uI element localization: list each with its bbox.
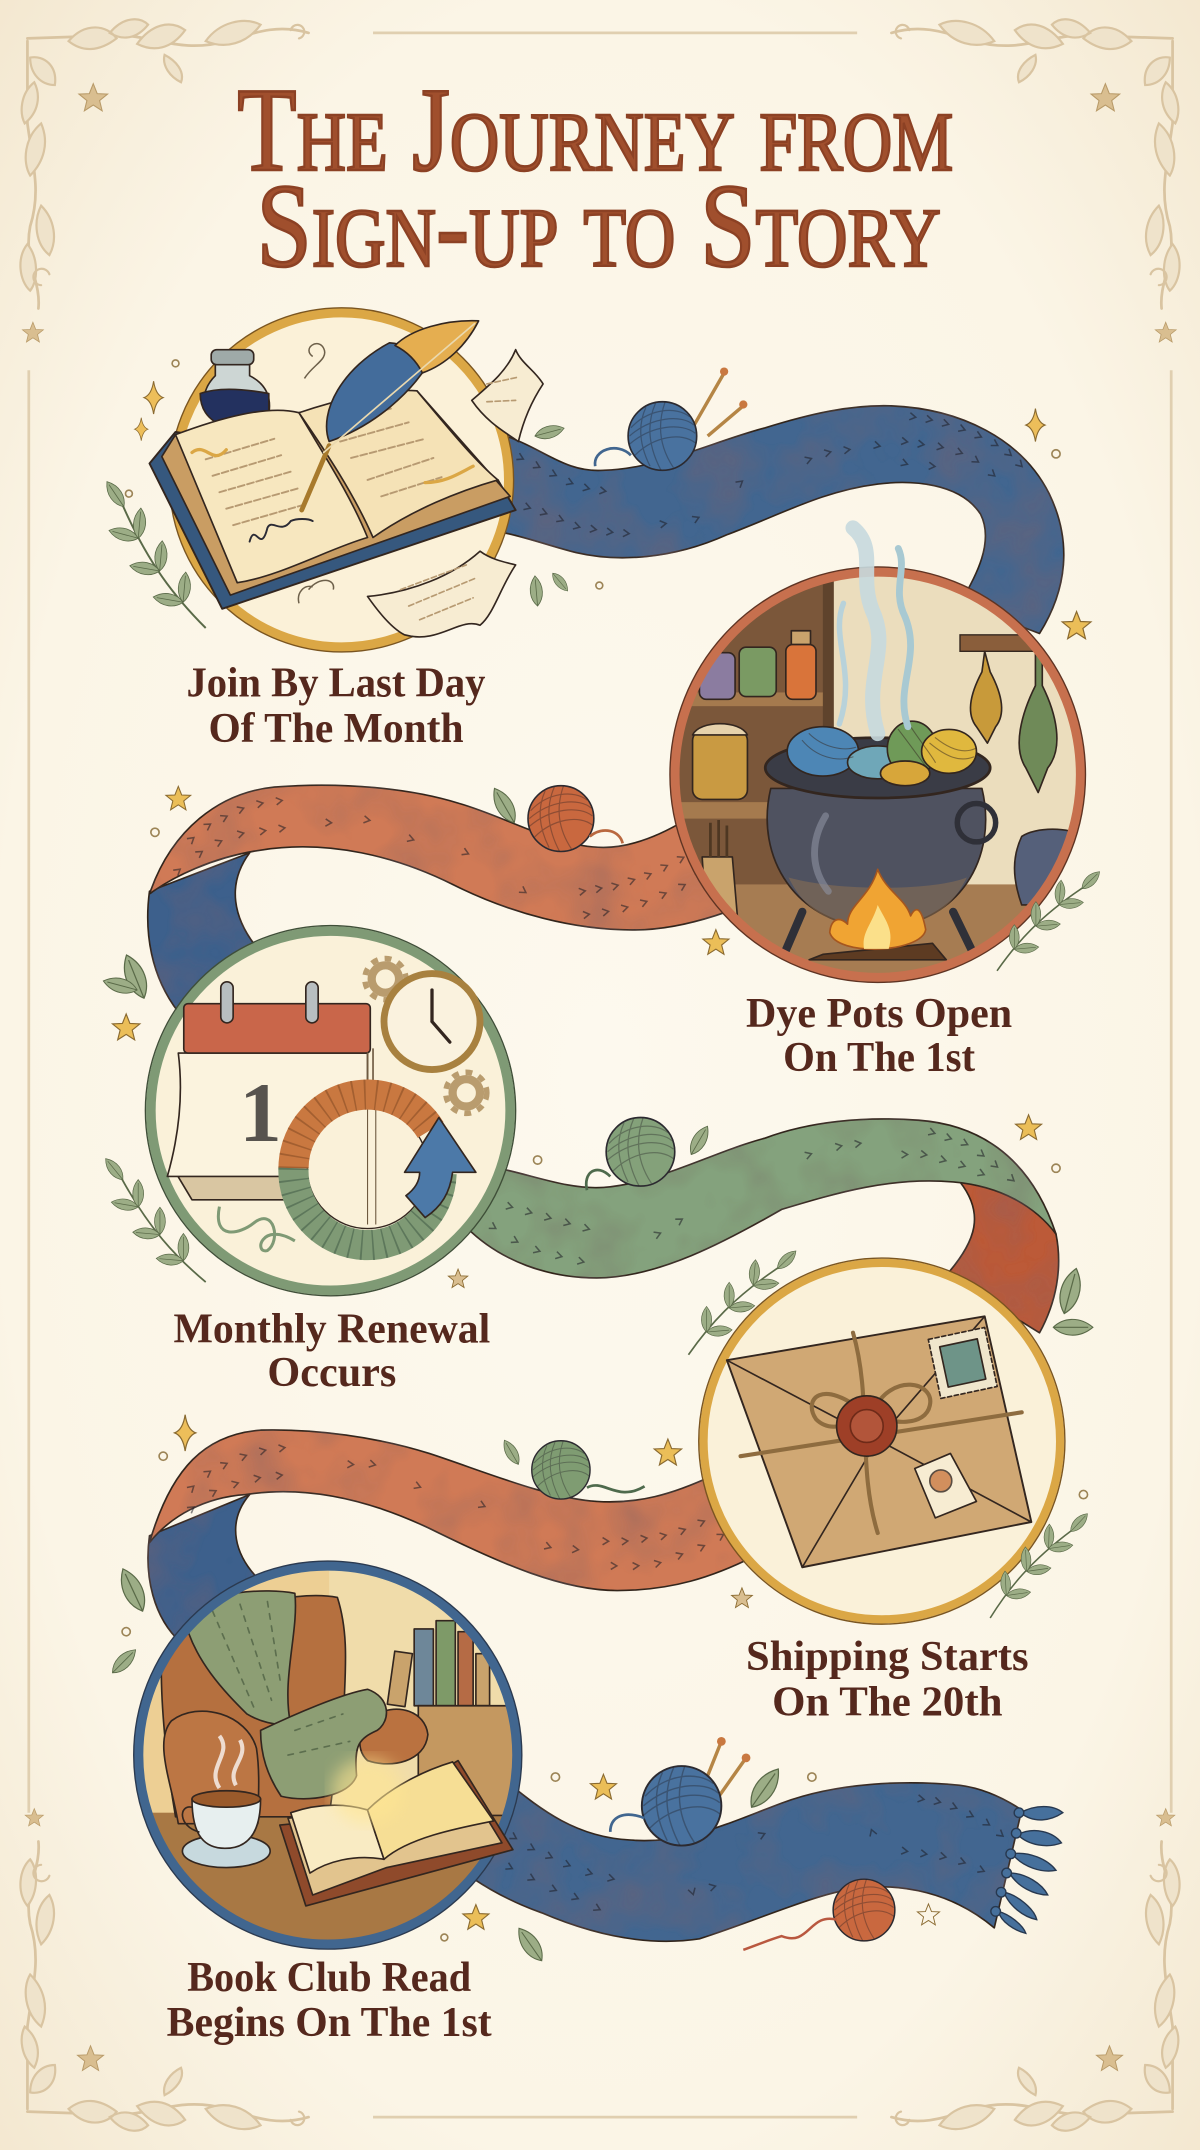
pottery: [1014, 828, 1068, 906]
small dots: [122, 360, 1088, 1941]
gold stars and sparkles: [112, 381, 1091, 1929]
step 3 label: Occurs: [267, 1349, 396, 1396]
step 4 label: On The 20th: [772, 1678, 1003, 1725]
icon: open book: [149, 390, 516, 609]
scarf: orange second segment: [149, 785, 727, 930]
yarn balls and knitting needles: [528, 367, 895, 1950]
icon: clock: [384, 974, 480, 1070]
scarf: green segment: [466, 1119, 1056, 1278]
step 1 label: [187, 660, 485, 752]
icon: hanging herbs: [970, 651, 1057, 793]
title: [237, 64, 953, 292]
step 5 label: Book Club Read: [187, 1954, 471, 2001]
step 2: dye pots circle with cauldron: [669, 528, 1086, 990]
icon: ink bottle: [200, 350, 269, 428]
step 3 label: [173, 1305, 490, 1396]
step 4 label: [746, 1633, 1029, 1725]
step 3: renewal circle with calendar and clock: [145, 926, 516, 1296]
title: Sign-up to Story: [256, 160, 941, 292]
icon: yarn renewal arrow: [293, 1095, 476, 1245]
calendar number: 1: [239, 1066, 282, 1160]
step 3 label: Monthly Renewal: [173, 1305, 490, 1352]
icon: teacup: [182, 1791, 270, 1868]
step 2 label: [746, 990, 1012, 1081]
step 4: shipping circle with parcel: [699, 1258, 1065, 1624]
wooden table: [152, 1812, 502, 1940]
jars: [693, 631, 816, 799]
scarf: blue connector behind orange (upper): [148, 853, 258, 1012]
step 2 label: Dye Pots Open: [746, 990, 1012, 1037]
icon: quill feather: [302, 321, 479, 510]
shelves: [680, 582, 834, 884]
icon: armchair: [161, 1596, 428, 1824]
icon: steam: [839, 528, 911, 734]
icon: fire: [809, 869, 946, 960]
step 2 label: On The 1st: [783, 1034, 975, 1081]
step 4 label: Shipping Starts: [746, 1633, 1029, 1680]
step 1 label: Join By Last Day: [187, 660, 485, 707]
scarf: blue connector behind orange (lower): [148, 1495, 263, 1643]
step 5 label: [167, 1954, 492, 2046]
step 1 label: Of The Month: [208, 705, 464, 752]
icon: glowing open book: [280, 1761, 513, 1906]
scarf: blue first segment: [496, 406, 1064, 633]
leaves and sprigs: [81, 422, 1103, 1965]
icon: bookshelf: [387, 1621, 521, 1815]
scarf: blue final segment with fringe: [473, 1783, 1063, 1941]
step 5 label: Begins On The 1st: [167, 1999, 492, 2046]
scarf: orange fourth segment: [149, 1430, 754, 1591]
scarf: orange connector: [946, 1182, 1059, 1333]
icon: loose pages: [368, 350, 543, 637]
icon: calendar: [167, 982, 373, 1200]
icon: gears: [365, 958, 487, 1113]
icon: cauldron: [765, 721, 996, 960]
step 5: book club circle with armchair and book: [134, 1561, 525, 1950]
icon: knitted throw: [184, 1591, 386, 1799]
icon: envelope: [727, 1316, 1031, 1567]
step 1: join circle with book, quill and ink: [149, 308, 543, 652]
title: The Journey from: [237, 64, 953, 196]
